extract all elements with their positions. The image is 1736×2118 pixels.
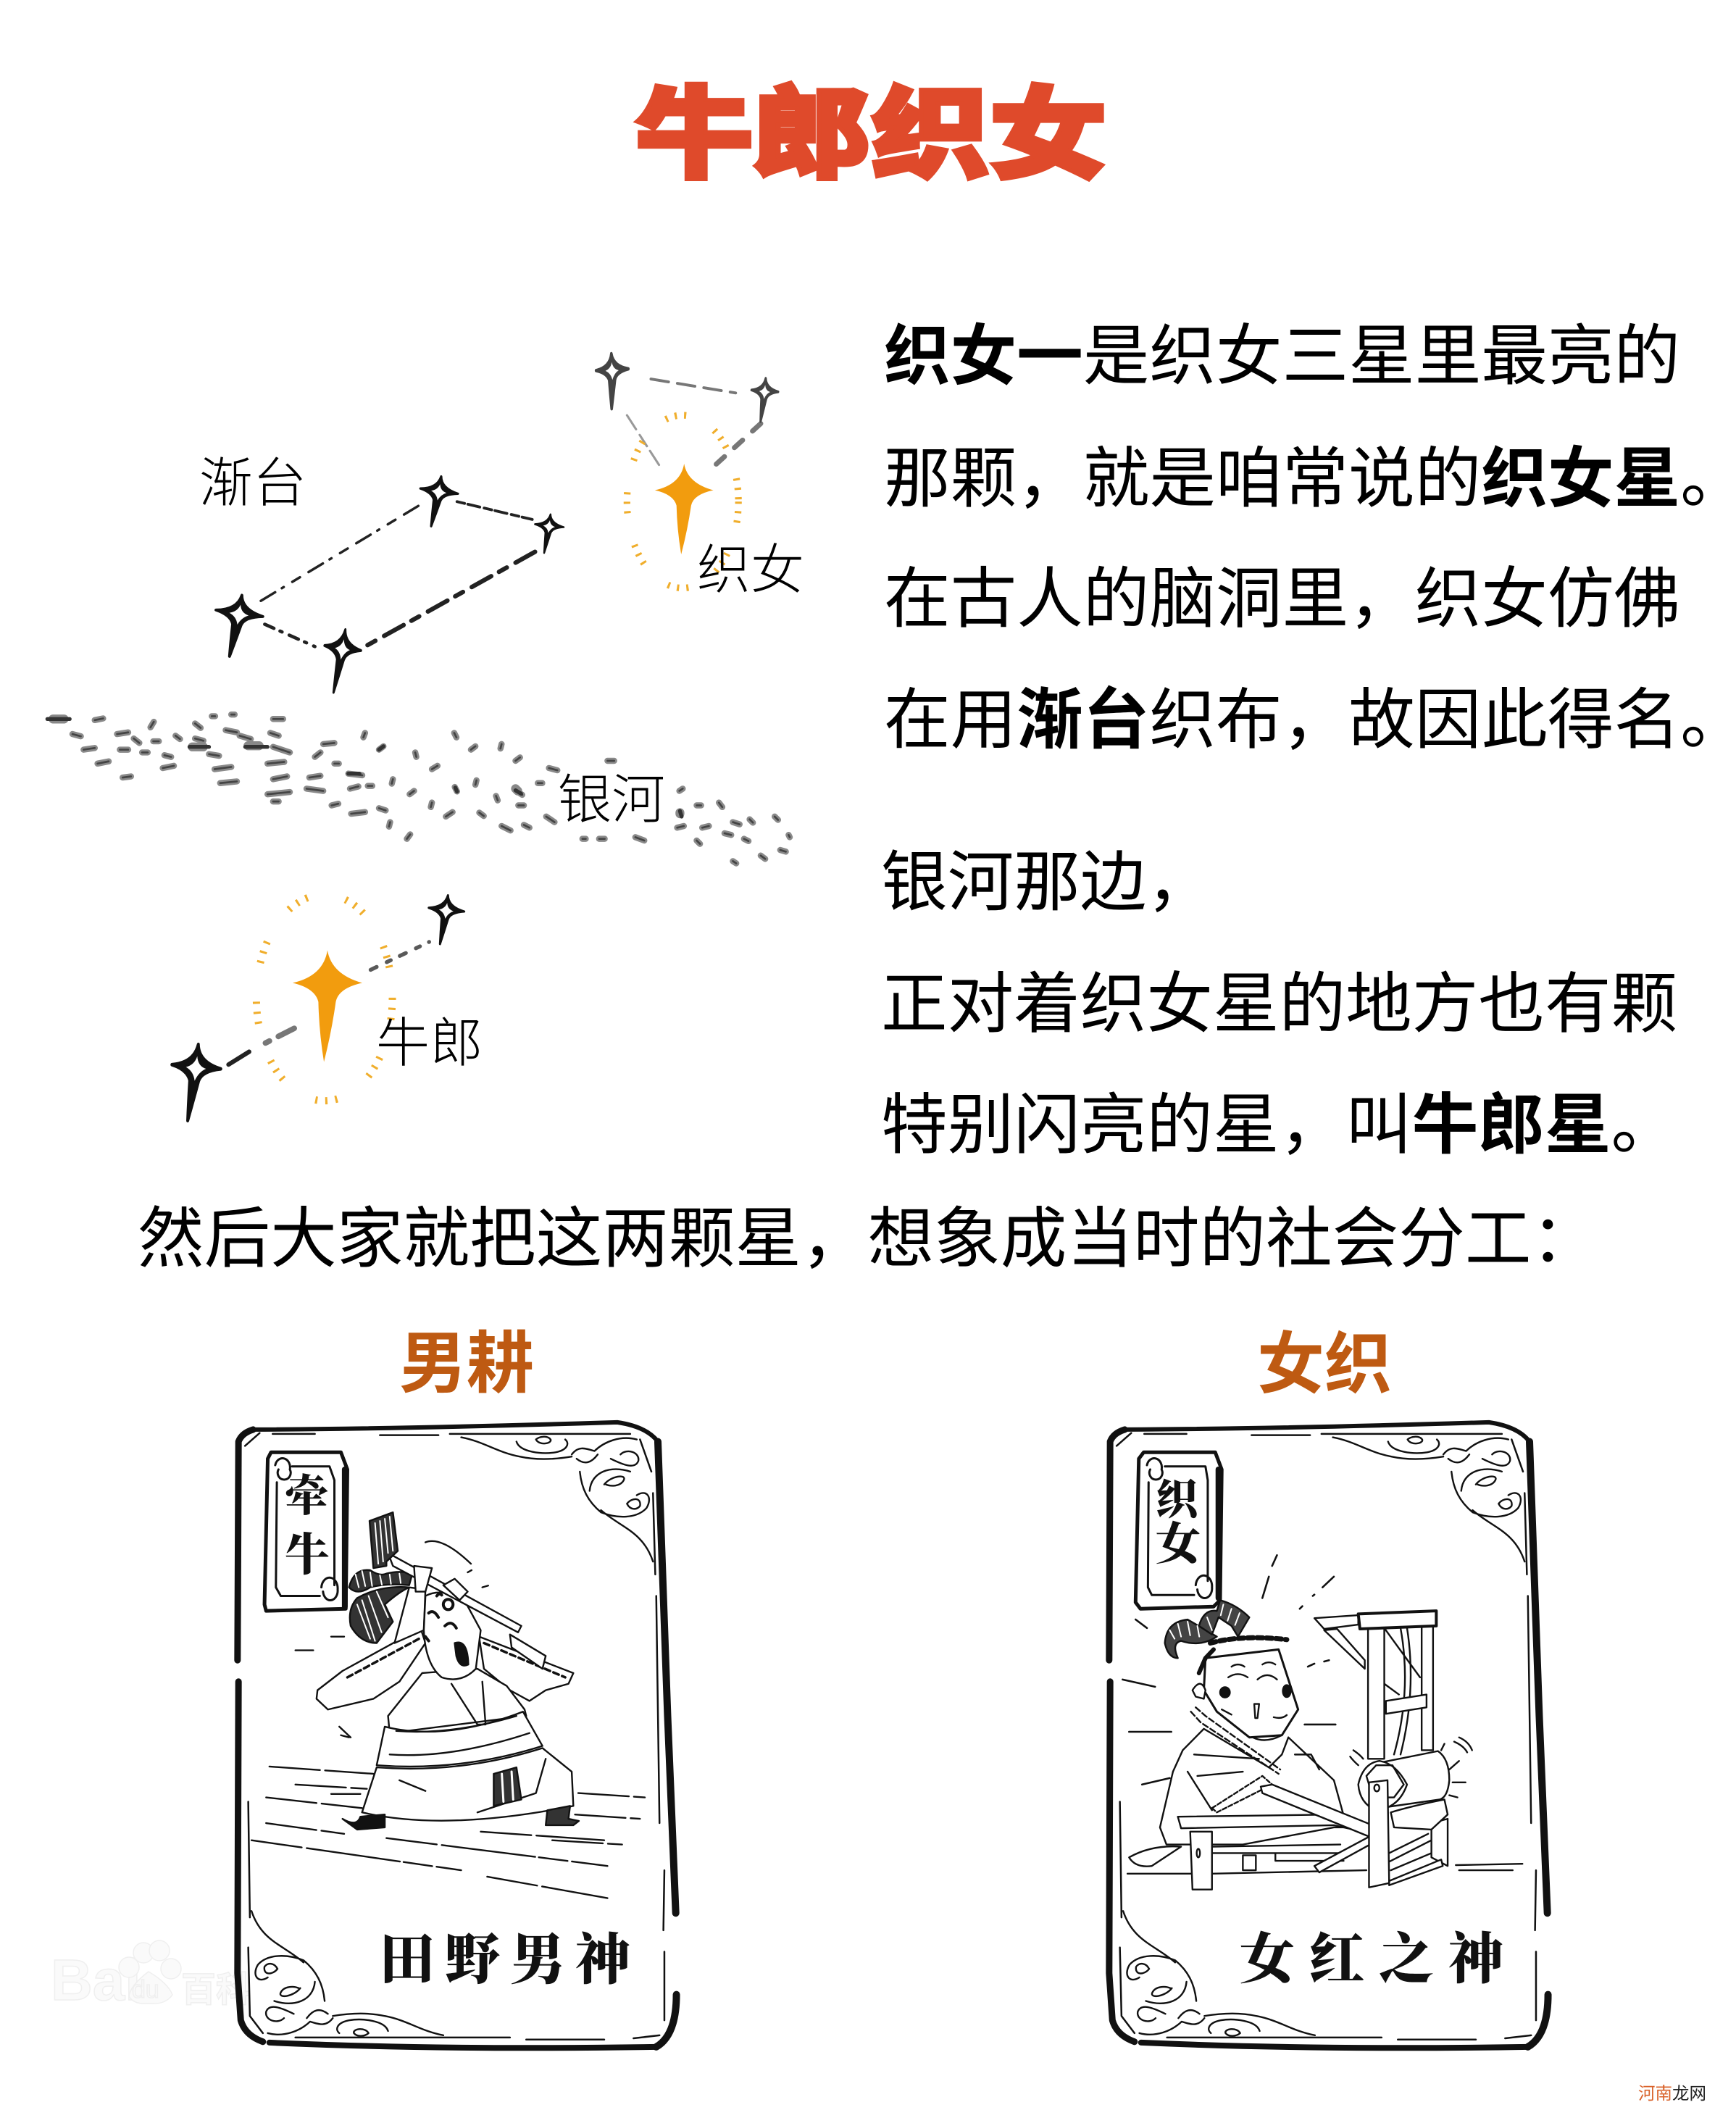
hair: [349, 1570, 412, 1592]
card frame: [1109, 1422, 1548, 2048]
shoes: [343, 1814, 385, 1830]
hands: [414, 1566, 432, 1592]
illustration: 牵牛 with hoe: [251, 1512, 645, 1898]
name plate: [1135, 1452, 1222, 1609]
illustration: 织女 at loom: [1122, 1555, 1522, 1890]
radiating lines: [1122, 1555, 1335, 1785]
label: 渐台: 渐台: [199, 453, 306, 513]
label: 牛郎: 牛郎: [376, 1013, 483, 1073]
plate text: 牵: [285, 1472, 328, 1520]
plate text: [285, 1472, 330, 1580]
label: 织女: 织女: [697, 540, 804, 600]
plate text: [1156, 1477, 1203, 1569]
head: [424, 1593, 480, 1680]
watermark: Baidu: 百科: [181, 1971, 251, 2009]
hair ornaments: [1165, 1619, 1217, 1658]
floor: [1127, 1864, 1522, 1874]
plate text: 牛: [285, 1531, 330, 1580]
label: 银河: 银河: [558, 770, 665, 830]
text block: 织女星: [884, 320, 1736, 757]
watermark: Baidu: du: [132, 1976, 159, 2004]
watermark: 河南龙网: 河南龙网: [1638, 2084, 1706, 2103]
text block: 牛郎星: 正对着织女星的地方也有颗: [881, 967, 1677, 1041]
card caption: 女红之神: 女红之神: [1240, 1930, 1518, 1990]
loom lower: [1212, 1834, 1432, 1870]
card: 织女: [1109, 1422, 1548, 2048]
roller: [1378, 1751, 1449, 1808]
dashed lines: [228, 379, 761, 1064]
text: 分工 intro: 然后大家就把这两颗星，想象成当时的社会分工：: [138, 1202, 1598, 1276]
ground: [251, 1767, 645, 1898]
text block: 织女星: 那颗，就是咱常说的织女星。: [884, 442, 1736, 516]
arms and scabbard: [510, 1635, 546, 1669]
card: 牵牛: [238, 1422, 677, 2048]
text block: 牛郎星: 特别闪亮的星，叫牛郎星。: [881, 1088, 1677, 1162]
head: [1204, 1649, 1298, 1738]
star cluster: 渐台: [210, 474, 565, 696]
name plate: [264, 1452, 347, 1611]
text block: 牛郎星: [881, 846, 1677, 1162]
loom frame: [1314, 1615, 1359, 1629]
title: 牛郎织女: [635, 53, 1107, 199]
collar: [1191, 1707, 1280, 1774]
body: [388, 1669, 526, 1733]
motion lines: [296, 1541, 488, 1738]
plate text: 织: [1156, 1477, 1203, 1524]
text block: 织女星: 在用渐台织布，故因此得名。: [884, 683, 1736, 757]
heading: 男耕: 男耕: [399, 1326, 534, 1401]
star chart: constellation diagram: [47, 353, 790, 1123]
star cluster: 织女三星: [596, 353, 779, 422]
table and beam: [1178, 1814, 1378, 1834]
watermark: Baidu: [51, 1940, 251, 2012]
sleeves: [317, 1628, 425, 1709]
star: 牛郎星 gold: [256, 895, 393, 1101]
text block: 织女星: 在古人的脑洞里，织女仿佛: [884, 562, 1680, 636]
watermark: Baidu: Bai: [51, 1948, 141, 2012]
star: 织女星 gold: [627, 415, 738, 588]
milky way: [47, 714, 790, 864]
card caption: 田野男神: 田野男神: [380, 1930, 640, 1991]
text block: 织女星: 织女一是织女三星里最亮的: [884, 320, 1680, 393]
heading: 女织: 女织: [1257, 1327, 1392, 1402]
robe: [1160, 1729, 1347, 1845]
text block: 牛郎星: 银河那边，: [881, 846, 1213, 920]
plate text: 女: [1156, 1519, 1203, 1569]
star cluster: 牛郎两侧: [167, 893, 466, 1123]
card frame: [238, 1422, 677, 2048]
hoe: [388, 1553, 522, 1633]
